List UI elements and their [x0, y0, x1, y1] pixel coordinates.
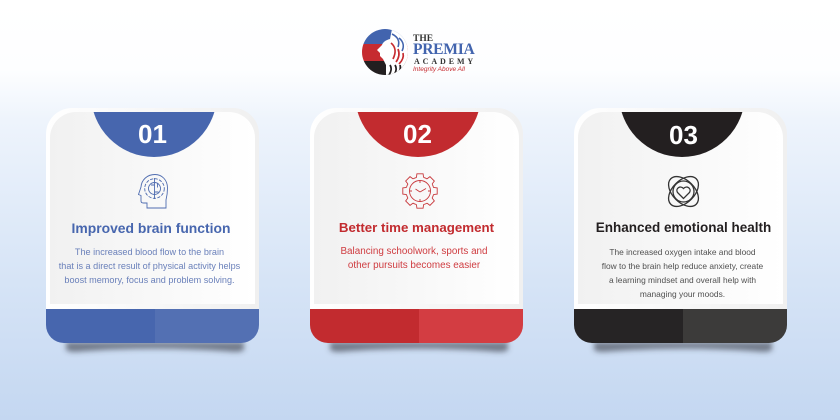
logo text: PREMIA — [413, 41, 474, 58]
heading: Enhanced emotional health — [596, 220, 771, 235]
body text: Balancing schoolwork, sports and — [340, 246, 488, 257]
number circle 2 — [355, 31, 481, 157]
logo — [362, 29, 476, 75]
panel: card 1 improved brain function — [46, 108, 259, 356]
footer bar — [574, 309, 787, 343]
footer bar — [310, 309, 523, 343]
body text: The increased oxygen intake and blood — [609, 247, 756, 257]
body text: other pursuits becomes easier — [348, 260, 480, 271]
number 03: 03 — [669, 120, 698, 150]
footer bar — [46, 309, 259, 343]
body text: flow to the brain help reduce anxiety, create — [602, 261, 763, 271]
body text: boost memory, focus and problem solving. — [64, 275, 235, 285]
icon: gear clock — [402, 173, 438, 209]
number 01: 01 — [138, 119, 167, 149]
body text: The increased blood flow to the brain — [75, 247, 224, 257]
logo emblem — [362, 29, 408, 75]
icon: heart rings — [668, 176, 700, 208]
heading: Better time management — [339, 220, 494, 235]
number 02: 02 — [403, 119, 432, 149]
logo text: Integrity Above All — [413, 66, 465, 73]
number circle 1 — [91, 31, 217, 157]
body text: a learning mindset and overall help with — [609, 275, 756, 285]
body text: managing your moods. — [640, 289, 725, 299]
panel: card 2 better time management — [310, 108, 523, 356]
icon: brain head — [138, 174, 168, 208]
logo text: ACADEMY — [414, 57, 476, 66]
heading: Improved brain function — [72, 220, 230, 236]
logo text: THE — [413, 34, 433, 44]
number circle 3 — [619, 31, 745, 157]
body text — [340, 246, 488, 271]
body text — [602, 247, 763, 299]
logo text — [413, 34, 476, 73]
body text: that is a direct result of physical activity helps — [59, 261, 240, 271]
panel: card 3 enhanced emotional health — [574, 108, 787, 356]
body text — [58, 247, 240, 285]
